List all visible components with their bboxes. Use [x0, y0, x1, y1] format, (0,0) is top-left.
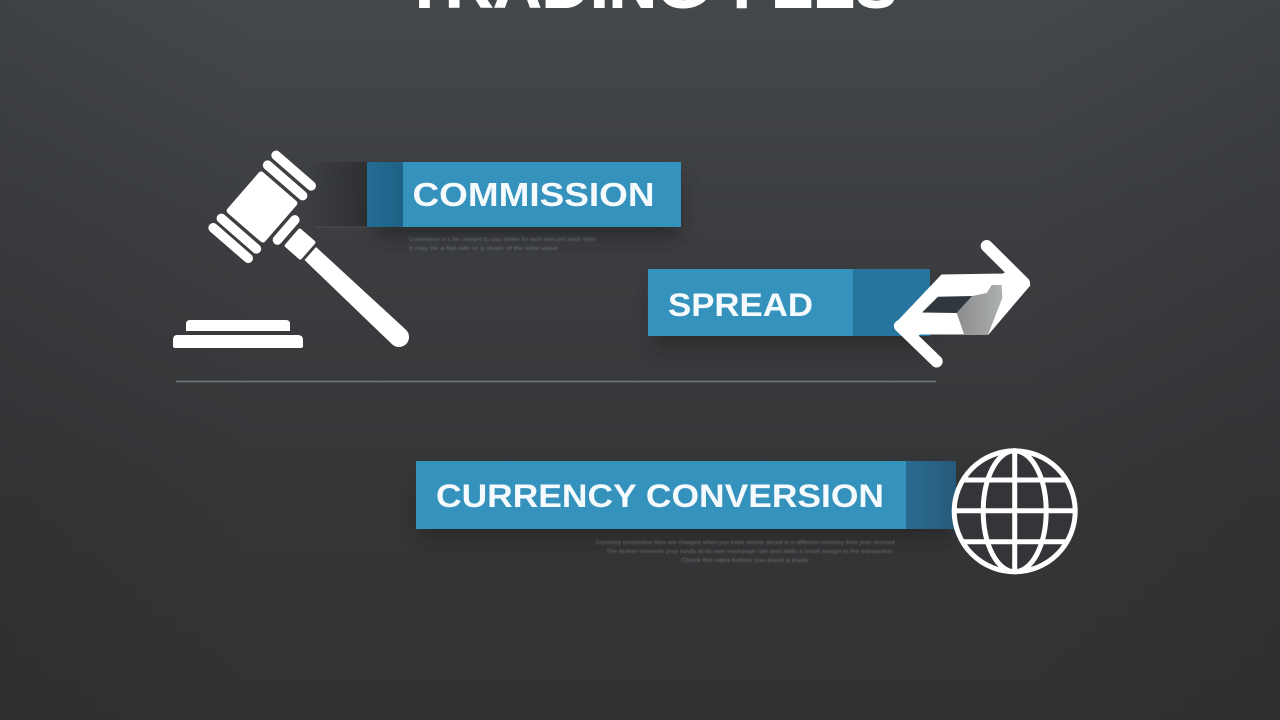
divider line	[176, 381, 936, 382]
panel: commission	[305, 162, 681, 238]
description: currency conversion: Check the rates before you place a trade	[681, 558, 808, 564]
label: currency conversion: CURRENCY CONVERSION	[436, 478, 884, 514]
description: currency conversion	[596, 540, 896, 564]
icon: exchange arrows	[894, 246, 1030, 362]
title	[404, 0, 897, 22]
description: commission: Commission is a fee charged by your broker for each executed trade order	[409, 237, 596, 243]
label: commission: COMMISSION	[412, 176, 654, 213]
description: commission	[409, 237, 596, 252]
description: currency conversion: The broker converts your funds at its own exchange rate and adds a small margin to the transaction	[606, 549, 893, 555]
icon: gavel	[173, 149, 409, 348]
infographic canvas	[0, 0, 1280, 574]
description: currency conversion: Currency conversion fees are charged when you trade assets priced in a different currency from your account	[596, 540, 896, 546]
description: commission: It may be a flat rate or a share of the total value	[409, 246, 558, 252]
panel: spread	[648, 269, 930, 346]
icon: globe	[950, 450, 1080, 572]
label: spread: SPREAD	[668, 287, 813, 323]
panel: currency conversion	[416, 461, 956, 538]
